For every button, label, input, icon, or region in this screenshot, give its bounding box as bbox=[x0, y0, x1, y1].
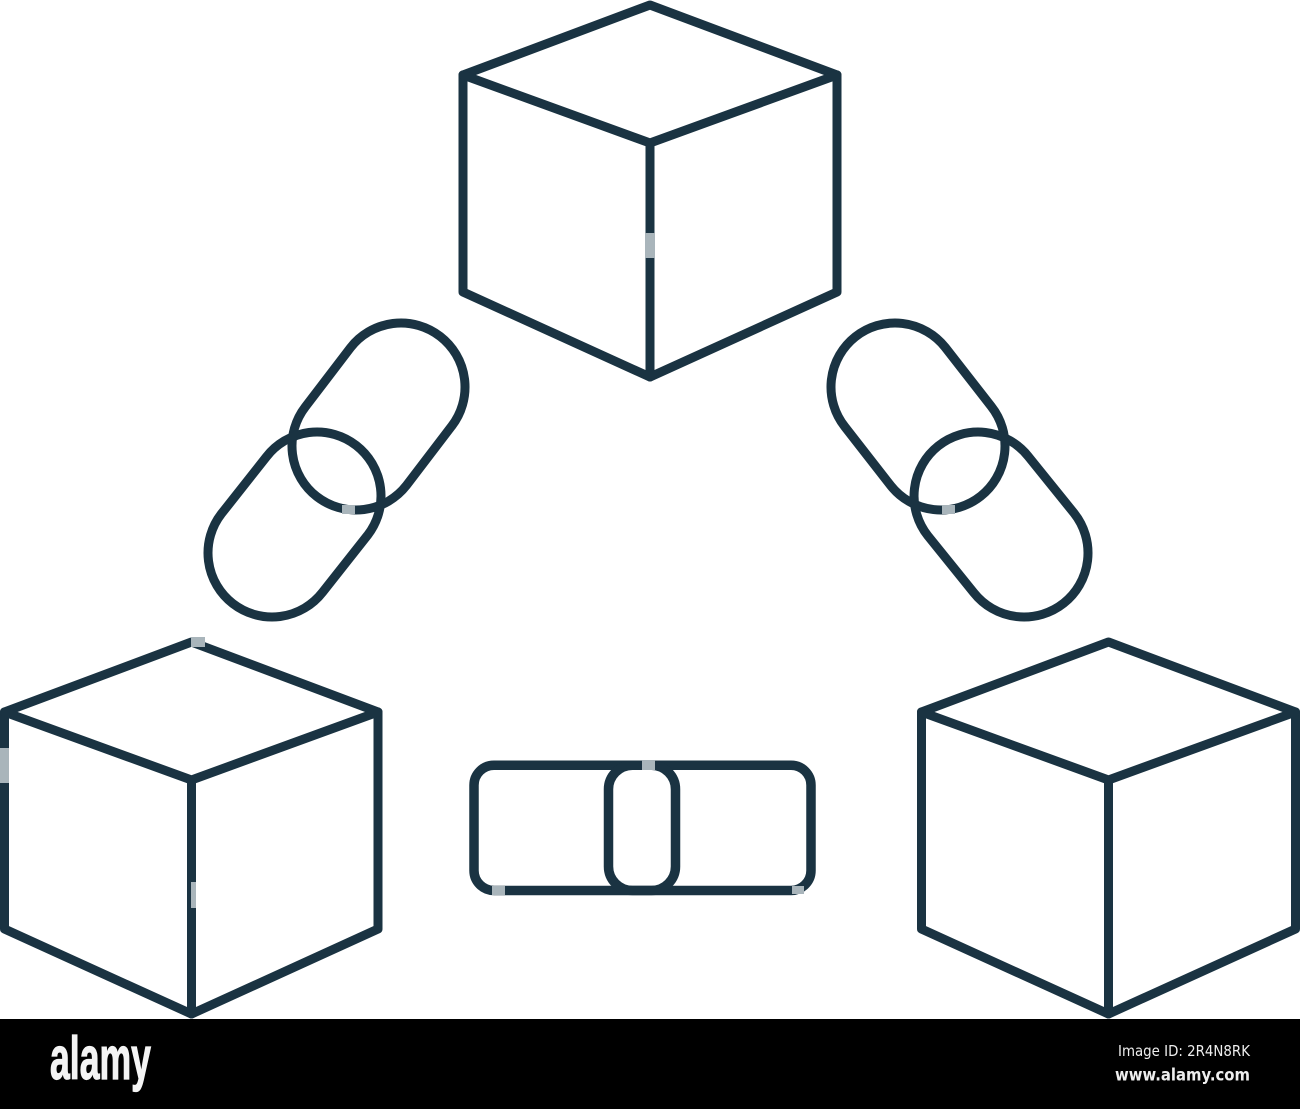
website: www.alamy.com bbox=[1115, 1066, 1250, 1086]
icon: left chain link bbox=[208, 323, 465, 617]
icon: bottom chain link bbox=[474, 765, 811, 890]
logo: alamy: alamy bbox=[50, 1025, 151, 1092]
watermark marks bbox=[0, 233, 955, 908]
icon: bottom left cube bbox=[4, 642, 378, 1014]
icon: top cube bbox=[463, 5, 837, 377]
icon: bottom right cube bbox=[922, 642, 1296, 1014]
icon: right chain link bbox=[831, 323, 1088, 617]
image id: Image ID: 2R4N8RK bbox=[1118, 1042, 1251, 1060]
footer bar bbox=[0, 1019, 1300, 1109]
